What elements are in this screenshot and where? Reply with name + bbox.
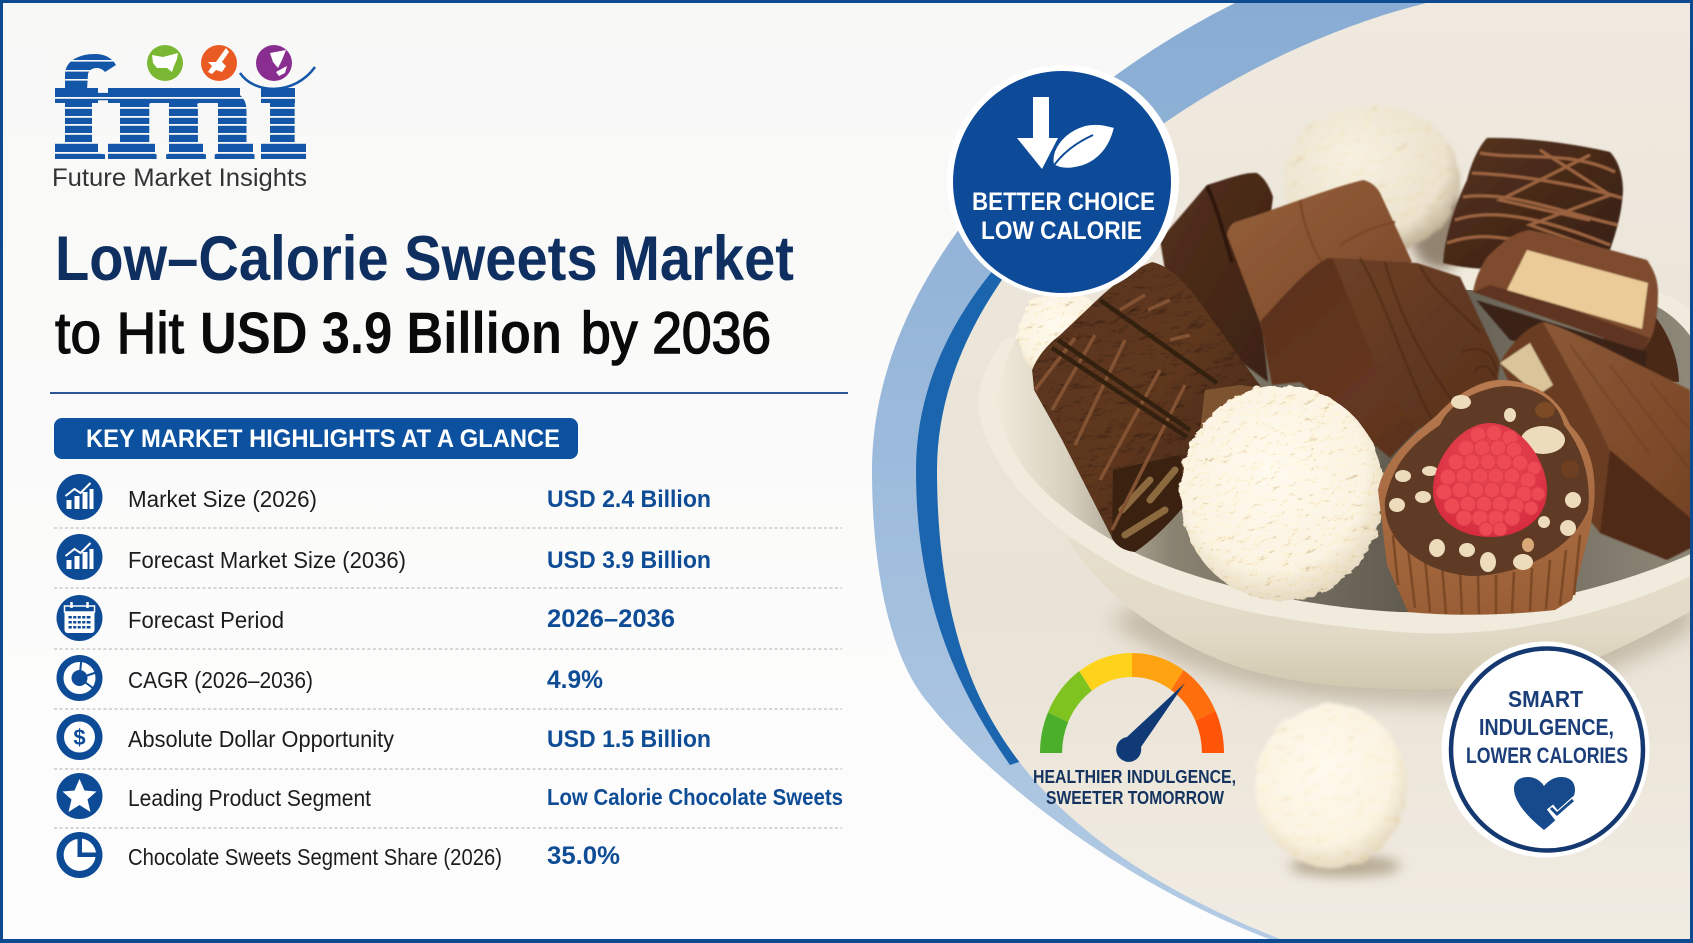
broken filling face <box>1112 455 1185 552</box>
foreground coconut truffle <box>1255 704 1407 877</box>
row: chocolate segment share: Chocolate Sweets Segment Share (2026) <box>128 844 502 870</box>
row: forecast market size: Forecast Market Size (2036) <box>128 547 406 573</box>
bowl interior <box>997 280 1693 612</box>
row: chocolate segment share <box>56 832 620 878</box>
cut bar with nougat filling <box>1473 230 1658 372</box>
logo swoosh <box>240 67 315 89</box>
icon: growth chart <box>56 534 102 580</box>
raspberry <box>1433 423 1547 537</box>
row: absolute dollar opportunity: Absolute Dollar Opportunity <box>128 726 394 752</box>
icon: down arrow <box>1017 97 1058 169</box>
icon: star <box>56 773 102 819</box>
right lower bar <box>1500 322 1693 560</box>
row: forecast market size: USD 3.9 Billion <box>547 547 711 574</box>
badge: better choice low calorie <box>947 65 1179 297</box>
gauge caption: HEALTHIER INDULGENCE, <box>1033 767 1236 787</box>
row: forecast period: Forecast Period <box>128 607 284 633</box>
icon: growth chart <box>56 474 102 520</box>
nougat end <box>1500 343 1553 395</box>
row: market size <box>56 474 711 520</box>
bowl body <box>1068 538 1690 689</box>
badge: smart indulgence <box>1442 642 1650 858</box>
icon: pie chart <box>56 832 102 878</box>
row: forecast period <box>56 595 675 641</box>
large centre chocolate bar <box>1260 258 1500 458</box>
photo: bowl of low-calorie chocolates <box>977 105 1693 877</box>
row: leading product segment <box>56 773 843 819</box>
badge text: BETTER CHOICE <box>972 188 1155 216</box>
icon: calendar <box>56 595 102 641</box>
row: forecast period: 2026–2036 <box>547 605 675 633</box>
left coconut truffle <box>1016 296 1094 368</box>
row: CAGR <box>56 655 603 701</box>
icon: orange globe <box>201 45 237 81</box>
bowl rim <box>1060 528 1690 634</box>
dark bar left back <box>1160 173 1273 382</box>
icon: leaf <box>1050 124 1115 171</box>
gauge: healthier indulgence <box>1033 665 1236 808</box>
gauge needle <box>1116 683 1185 762</box>
front coconut truffle <box>1180 385 1384 601</box>
drizzle lines <box>1035 295 1190 530</box>
title: by 2036 <box>581 301 771 366</box>
row: CAGR: CAGR (2026–2036) <box>128 667 313 693</box>
bowl shadow <box>1110 600 1693 705</box>
row: market size: Market Size (2026) <box>128 486 317 512</box>
badge: smart indulgence: INDULGENCE, <box>1479 714 1614 740</box>
milk chocolate bar <box>1227 180 1412 345</box>
title: USD 3.9 Billion <box>200 301 562 366</box>
icon: dollar <box>56 714 102 760</box>
row: market size: USD 2.4 Billion <box>547 486 711 513</box>
icon: dollar: $ <box>73 725 86 750</box>
badge: smart indulgence: LOWER CALORIES <box>1466 743 1628 768</box>
fmi wordmark: fmi <box>54 32 306 191</box>
dark striped bar <box>1443 138 1623 269</box>
row: absolute dollar opportunity <box>56 714 711 760</box>
row: forecast market size <box>56 534 711 580</box>
title <box>55 224 794 366</box>
cup <box>1378 380 1595 615</box>
gauge arc <box>1051 665 1213 753</box>
logo name: Future Market Insights <box>52 164 307 192</box>
row: chocolate segment share: 35.0% <box>547 842 620 870</box>
dark blue arc band <box>916 262 1200 765</box>
icon: purple globe <box>256 45 292 81</box>
panel: photo area with arcs <box>872 3 1693 939</box>
section heading pill: KEY MARKET HIGHLIGHTS AT A GLANCE <box>86 425 560 453</box>
icon: heart with check <box>1514 777 1576 830</box>
section heading pill <box>54 418 578 459</box>
cream photo background <box>937 3 1693 939</box>
panel: market highlights table <box>54 474 843 878</box>
title divider <box>50 392 848 394</box>
badge text: SMART <box>1508 686 1583 712</box>
title: to Hit <box>55 301 184 366</box>
nougat filling <box>1507 250 1648 329</box>
small dark bar behind cut bar <box>1604 318 1679 382</box>
left textured drizzled bar <box>1032 262 1262 552</box>
icon: green globe <box>147 45 183 81</box>
nut pieces <box>1389 395 1581 572</box>
title: Low–Calorie Sweets Market <box>55 224 794 294</box>
badge: better choice low calorie: LOW CALORIE <box>981 217 1142 245</box>
row: CAGR: 4.9% <box>547 666 603 694</box>
row: leading product segment: Low Calorie Chocolate Sweets <box>547 784 843 810</box>
row: leading product segment: Leading Product Segment <box>128 785 372 811</box>
icon: donut chart <box>56 655 102 701</box>
back coconut truffle <box>1284 105 1470 270</box>
logo: Future Market Insights <box>50 32 315 192</box>
chocolate cup with raspberry <box>1378 380 1595 615</box>
gauge: healthier indulgence: SWEETER TOMORROW <box>1046 788 1224 808</box>
row: absolute dollar opportunity: USD 1.5 Billion <box>547 726 711 753</box>
light blue arc band <box>872 3 1693 939</box>
caramel end face <box>1200 385 1254 428</box>
chocolate top <box>1385 386 1589 576</box>
